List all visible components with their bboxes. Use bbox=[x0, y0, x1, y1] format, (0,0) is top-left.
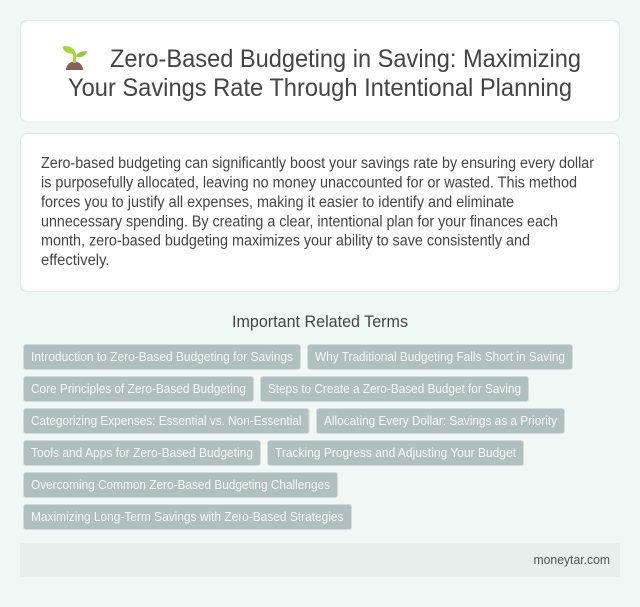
tag bbox=[24, 504, 352, 530]
tag: Overcoming Common Zero-Based Budgeting Challenges bbox=[31, 477, 330, 492]
text block: summary: Zero-based budgeting can significantly boost your savings rate by ensuring every dollar bbox=[41, 155, 594, 172]
tag bbox=[260, 376, 528, 402]
tag bbox=[24, 472, 338, 498]
panel: summary paragraph bbox=[20, 134, 620, 292]
tag bbox=[24, 408, 309, 434]
footer bbox=[20, 543, 620, 577]
text block: summary: is purposefully allocated, leaving no money unaccounted for or wasted. This method bbox=[41, 174, 577, 191]
tag bbox=[24, 376, 254, 402]
text block: summary: effectively. bbox=[41, 252, 110, 269]
icon: seedling bbox=[62, 46, 87, 70]
tag bbox=[24, 440, 260, 466]
title: Zero-Based Budgeting in Saving: Maximizing bbox=[110, 45, 581, 73]
tag: Allocating Every Dollar: Savings as a Priority bbox=[324, 413, 558, 428]
text block: summary: forces you to justify all expenses, making it easier to identify and eliminate bbox=[41, 194, 514, 211]
tag: Steps to Create a Zero-Based Budget for Saving bbox=[268, 381, 521, 396]
tag: Categorizing Expenses: Essential vs. Non-Essential bbox=[31, 413, 302, 428]
text block: summary: month, zero-based budgeting maximizes your ability to save consistently and bbox=[41, 233, 530, 250]
tag: Tracking Progress and Adjusting Your Budget bbox=[275, 445, 516, 460]
heading: related terms: Important Related Terms bbox=[232, 313, 408, 331]
tag: Maximizing Long-Term Savings with Zero-Based Strategies bbox=[31, 509, 344, 524]
title bbox=[68, 45, 581, 102]
tag bbox=[316, 408, 564, 434]
panel: related term tags bbox=[24, 344, 572, 530]
title: Your Savings Rate Through Intentional Planning bbox=[68, 74, 572, 102]
footer: moneytar.com bbox=[534, 552, 610, 567]
tag bbox=[268, 440, 524, 466]
text block: summary bbox=[41, 155, 594, 269]
tag: Tools and Apps for Zero-Based Budgeting bbox=[31, 445, 253, 460]
tag bbox=[24, 344, 300, 370]
tag: Why Traditional Budgeting Falls Short in Saving bbox=[315, 349, 565, 364]
tag: Introduction to Zero-Based Budgeting for Savings bbox=[31, 349, 293, 364]
text block: summary: unnecessary spending. By creating a clear, intentional plan for your finances each bbox=[41, 213, 558, 230]
panel: title card bbox=[20, 20, 620, 122]
tag: Core Principles of Zero-Based Budgeting bbox=[31, 381, 246, 396]
tag bbox=[308, 344, 572, 370]
